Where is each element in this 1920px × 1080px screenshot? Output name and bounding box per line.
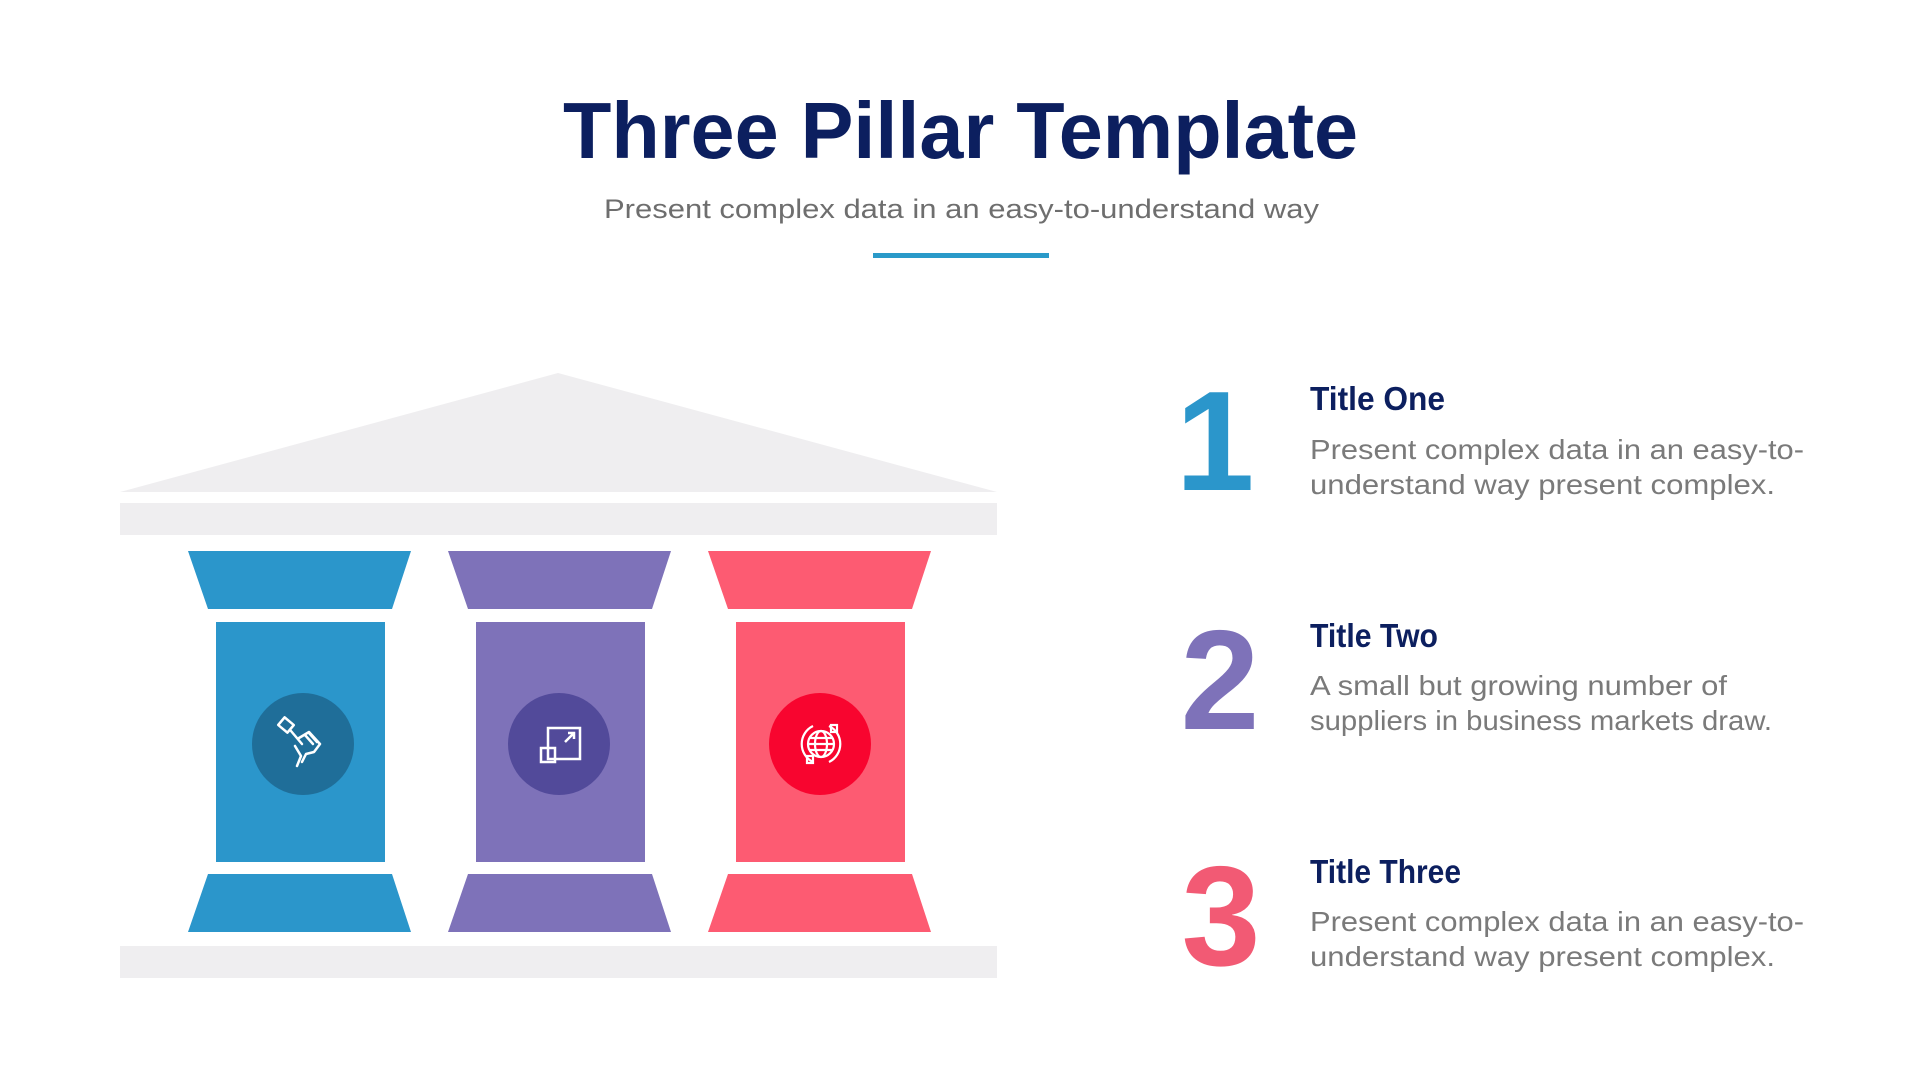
item 3: 3 [1182, 837, 1260, 996]
item 1: understand way present complex. [1310, 469, 1775, 500]
icon: hand with flag [278, 717, 320, 766]
subtitle: Present complex data in an easy-to-understand way [604, 194, 1320, 224]
item 3: understand way present complex. [1310, 941, 1775, 972]
item 2: A small but growing number of [1310, 670, 1727, 701]
title: Three Pillar Template [563, 86, 1358, 175]
pillar: red [708, 551, 931, 932]
item 1: 1 [1176, 362, 1254, 521]
pillar: blue [188, 551, 411, 932]
accent underline [873, 253, 1049, 258]
temple diagram [120, 373, 997, 978]
beam [120, 503, 997, 535]
item 3: Title Three [1310, 853, 1461, 890]
plinth [120, 946, 997, 978]
item 3 [1182, 837, 1804, 996]
item 2: Title Two [1310, 617, 1438, 654]
icon: resize [541, 728, 580, 762]
item 2 [1181, 601, 1772, 760]
roof [120, 373, 997, 492]
pillar: purple [448, 551, 671, 932]
item 1: Title One [1310, 380, 1445, 417]
item 3: Present complex data in an easy-to- [1310, 906, 1804, 937]
item 2: 2 [1181, 601, 1259, 760]
item 1 [1176, 362, 1804, 521]
item 1: Present complex data in an easy-to- [1310, 434, 1804, 465]
icon: globe [802, 725, 840, 763]
item 2: suppliers in business markets draw. [1310, 705, 1772, 736]
